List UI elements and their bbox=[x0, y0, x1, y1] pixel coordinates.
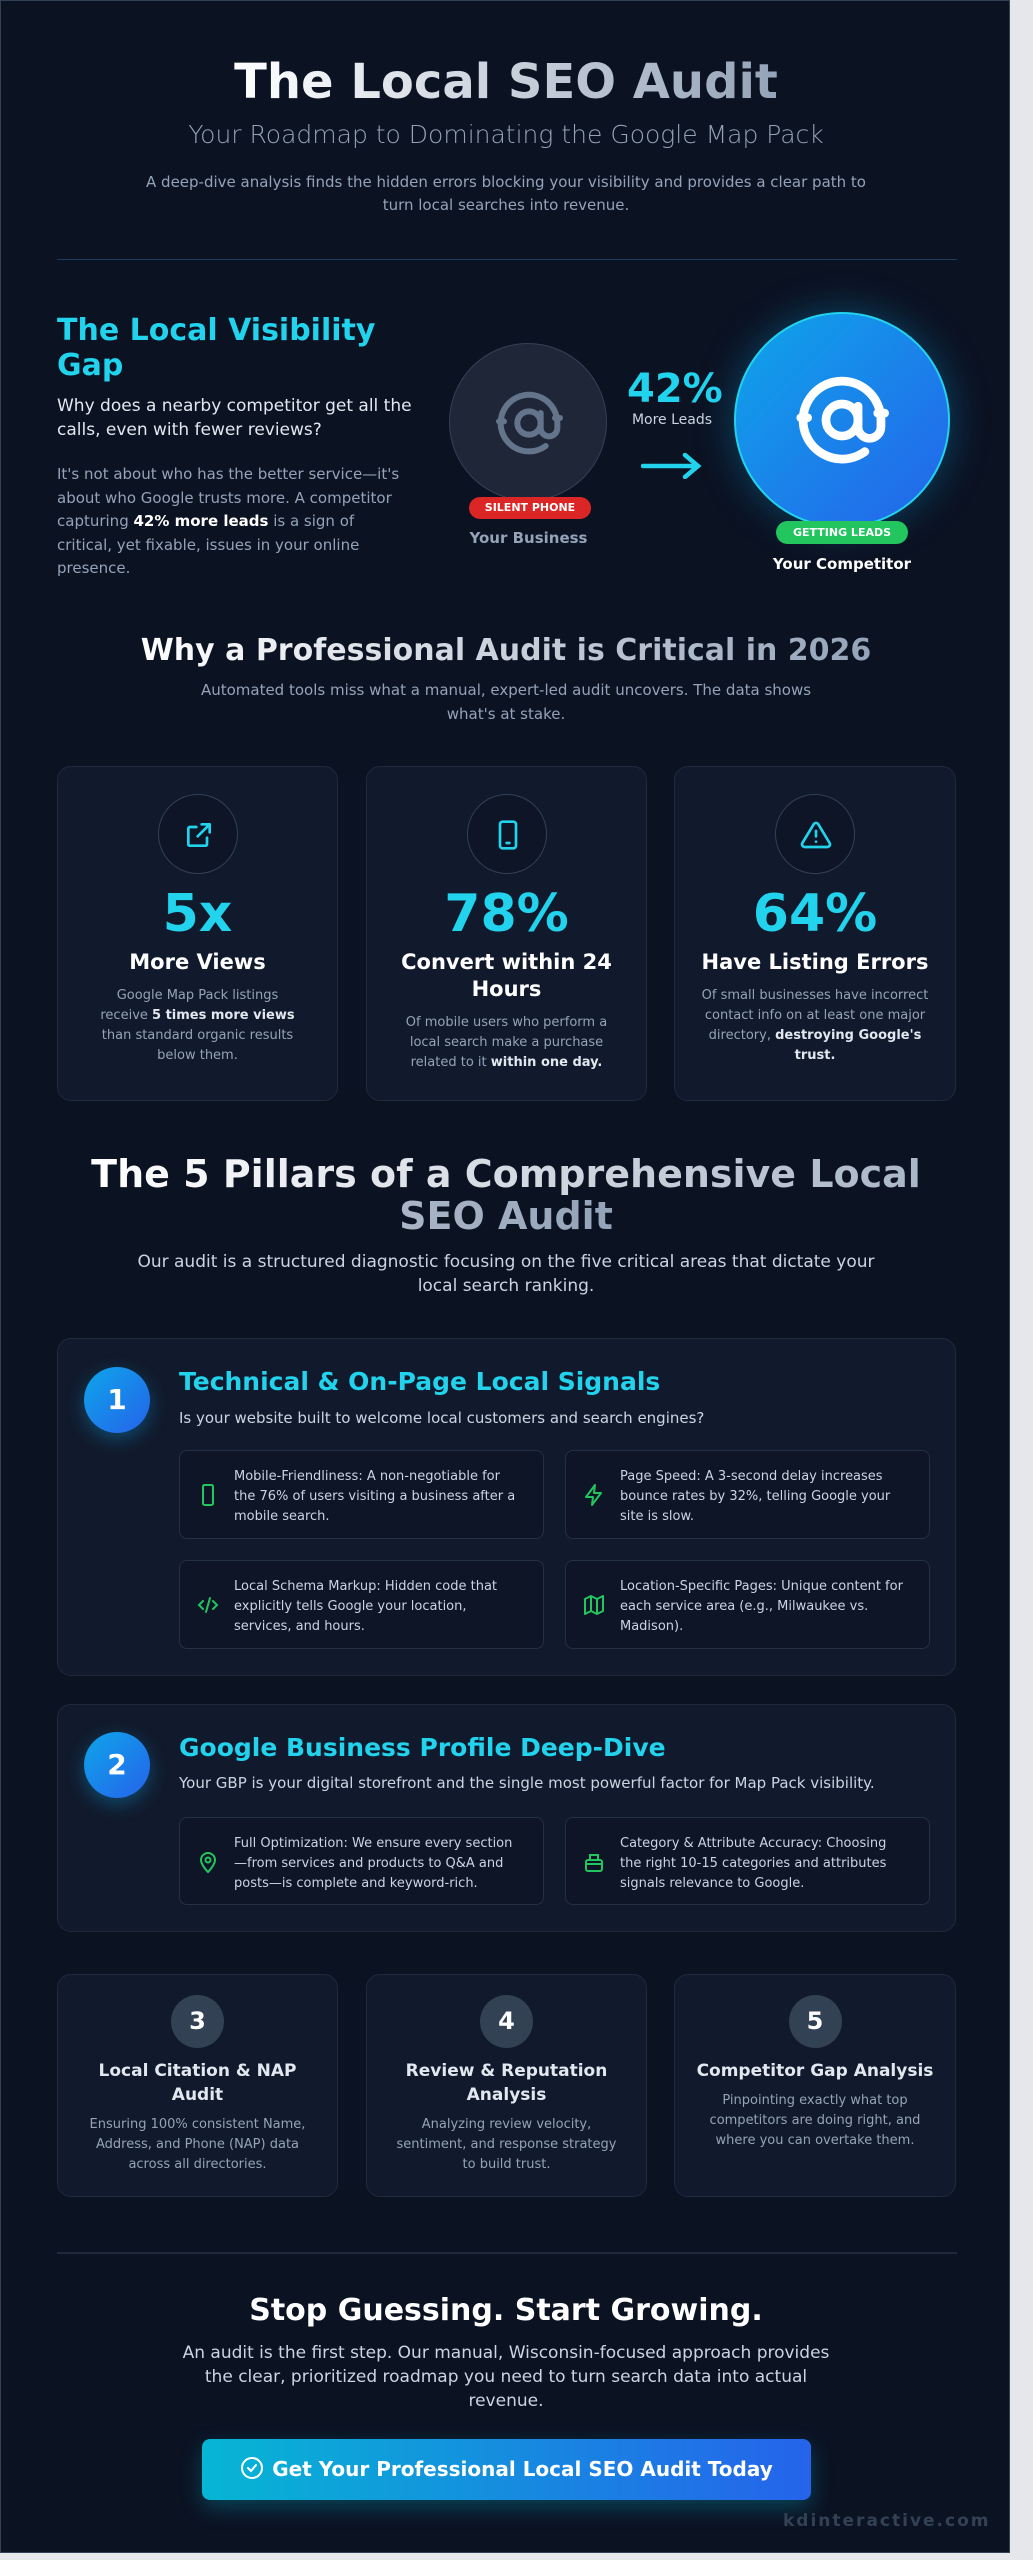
stat card: 64%: Of small businesses have incorrect contact info on at least one major directory, destroying Google's trust. bbox=[702, 988, 928, 1063]
heading: 5 pillars: The 5 Pillars of a Comprehensive Local SEO Audit bbox=[91, 1152, 921, 1238]
title: The Local SEO Audit bbox=[234, 54, 778, 110]
icon: phone bbox=[467, 794, 547, 874]
card: pillar 5 bbox=[674, 1974, 956, 2197]
stat: 42%: 42% bbox=[627, 366, 723, 412]
intro text: A deep-dive analysis finds the hidden errors blocking your visibility and provides a clear path to turn local searches into revenue. bbox=[146, 173, 866, 214]
icon: warning bbox=[775, 794, 855, 874]
icon: external link bbox=[158, 794, 238, 874]
item: full optimization bbox=[179, 1817, 544, 1905]
card: pillar 5: 5 bbox=[807, 2007, 823, 2035]
badge: getting leads: GETTING LEADS bbox=[793, 526, 891, 539]
item: mobile bbox=[179, 1450, 544, 1539]
heading: CTA: Stop Guessing. Start Growing. bbox=[249, 2293, 763, 2328]
card: pillar 5: Pinpointing exactly what top competitors are doing right, and where you can overtake them. bbox=[710, 2093, 920, 2148]
item: speed bbox=[565, 1450, 930, 1539]
stat card: 78% bbox=[366, 766, 647, 1101]
label: your competitor: Your Competitor bbox=[773, 555, 911, 573]
card: pillar 4 bbox=[366, 1974, 647, 2197]
CTA text: An audit is the first step. Our manual, Wisconsin-focused approach provides the clear, prioritized roadmap you need to turn search data into actual revenue. bbox=[183, 2343, 829, 2411]
stat card: 78%: 78% bbox=[444, 884, 569, 944]
pillar 1 title: Technical & On-Page Local Signals bbox=[179, 1367, 660, 1396]
card: pillar 5: Competitor Gap Analysis bbox=[697, 2061, 933, 2081]
item: schema: Local Schema Markup: Hidden code that explicitly tells Google your location, services, and hours. bbox=[234, 1579, 497, 1634]
item: location pages bbox=[565, 1560, 930, 1649]
number badge 2 bbox=[84, 1732, 150, 1798]
panel: pillar 2 bbox=[57, 1704, 956, 1932]
pillars intro: Our audit is a structured diagnostic focusing on the five critical areas that dictate your local search ranking. bbox=[137, 1252, 875, 1296]
heading: visibility gap: The Local Visibility Gap bbox=[57, 313, 375, 383]
button bbox=[202, 2439, 811, 2500]
card: pillar 3: Local Citation & NAP Audit bbox=[99, 2061, 296, 2105]
stat card: 5x: 5x bbox=[163, 884, 232, 944]
subheading: Automated tools miss what a manual, expert-led audit uncovers. The data shows what's at stake. bbox=[201, 681, 811, 723]
question text: Why does a nearby competitor get all the calls, even with fewer reviews? bbox=[57, 396, 412, 440]
icon: your business circle bbox=[449, 343, 607, 501]
number badge 2: 2 bbox=[107, 1748, 127, 1781]
stat card: 64%: Have Listing Errors bbox=[702, 950, 928, 974]
item: mobile: Mobile-Friendliness: A non-negotiable for the 76% of users visiting a business after a mobile search. bbox=[234, 1469, 515, 1524]
card: pillar 3: 3 bbox=[189, 2007, 206, 2035]
button: Get Your Professional Local SEO Audit Today bbox=[272, 2457, 773, 2481]
panel: pillar 1: Is your website built to welcome local customers and search engines? bbox=[179, 1409, 704, 1427]
number badge 1 bbox=[84, 1367, 150, 1433]
comparison graphic: More Leads bbox=[632, 412, 712, 428]
item: category accuracy: Category & Attribute Accuracy: Choosing the right 10-15 categories and attributes signals relevance to Google. bbox=[620, 1836, 886, 1891]
number badge 1: 1 bbox=[107, 1383, 127, 1416]
pillar 2 title: Google Business Profile Deep-Dive bbox=[179, 1733, 666, 1762]
stat card: 64%: 64% bbox=[753, 884, 877, 944]
card: pillar 3: Ensuring 100% consistent Name, Address, and Phone (NAP) data across all directories. bbox=[90, 2117, 305, 2172]
heading: why audit: Why a Professional Audit is Critical in 2026 bbox=[141, 633, 871, 668]
badge: getting leads bbox=[776, 521, 908, 544]
watermark: kdinteractive.com bbox=[783, 2511, 990, 2531]
card: pillar 3 bbox=[57, 1974, 338, 2197]
panel: pillar 1 bbox=[57, 1338, 956, 1676]
paragraph: It's not about who has the better service—it's about who Google trusts more. A competitor capturing 42% more leads is a sign of critical, yet fixable, issues in your online presence. bbox=[57, 465, 399, 577]
comparison graphic bbox=[449, 292, 970, 573]
icon: competitor circle bbox=[734, 312, 950, 528]
badge: silent phone bbox=[469, 497, 591, 519]
item: location pages: Location-Specific Pages: Unique content for each service area (e.g., Milwaukee vs. Madison). bbox=[620, 1579, 903, 1634]
item: category accuracy bbox=[565, 1817, 930, 1905]
stat card: 78%: Of mobile users who perform a local search make a purchase related to it within one day. bbox=[406, 1015, 607, 1070]
stat card: 78%: Convert within 24 Hours bbox=[401, 950, 612, 1001]
card: pillar 4: 4 bbox=[498, 2007, 515, 2035]
item: speed: Page Speed: A 3-second delay increases bounce rates by 32%, telling Google your site is slow. bbox=[620, 1469, 890, 1524]
item: full optimization: Full Optimization: We ensure every section —from services and products to Q&A and posts—is complete and keyword-rich. bbox=[234, 1836, 512, 1891]
stat card: 5x: More Views bbox=[129, 950, 266, 974]
stat card: 5x: Google Map Pack listings receive 5 times more views than standard organic results below them. bbox=[100, 988, 295, 1063]
arrow bbox=[641, 453, 702, 479]
card: pillar 4: Analyzing review velocity, sentiment, and response strategy to build trust. bbox=[396, 2117, 616, 2172]
card: pillar 4: Review & Reputation Analysis bbox=[406, 2061, 607, 2105]
item: schema bbox=[179, 1560, 544, 1649]
subtitle: Your Roadmap to Dominating the Google Map Pack bbox=[188, 120, 824, 149]
panel: pillar 2: Your GBP is your digital storefront and the single most powerful factor for Map Pack visibility. bbox=[179, 1774, 875, 1792]
stat card: 64% bbox=[674, 766, 956, 1101]
label: your business: Your Business bbox=[470, 529, 587, 547]
stat card: 5x bbox=[57, 766, 338, 1101]
badge: silent phone: SILENT PHONE bbox=[485, 501, 575, 514]
